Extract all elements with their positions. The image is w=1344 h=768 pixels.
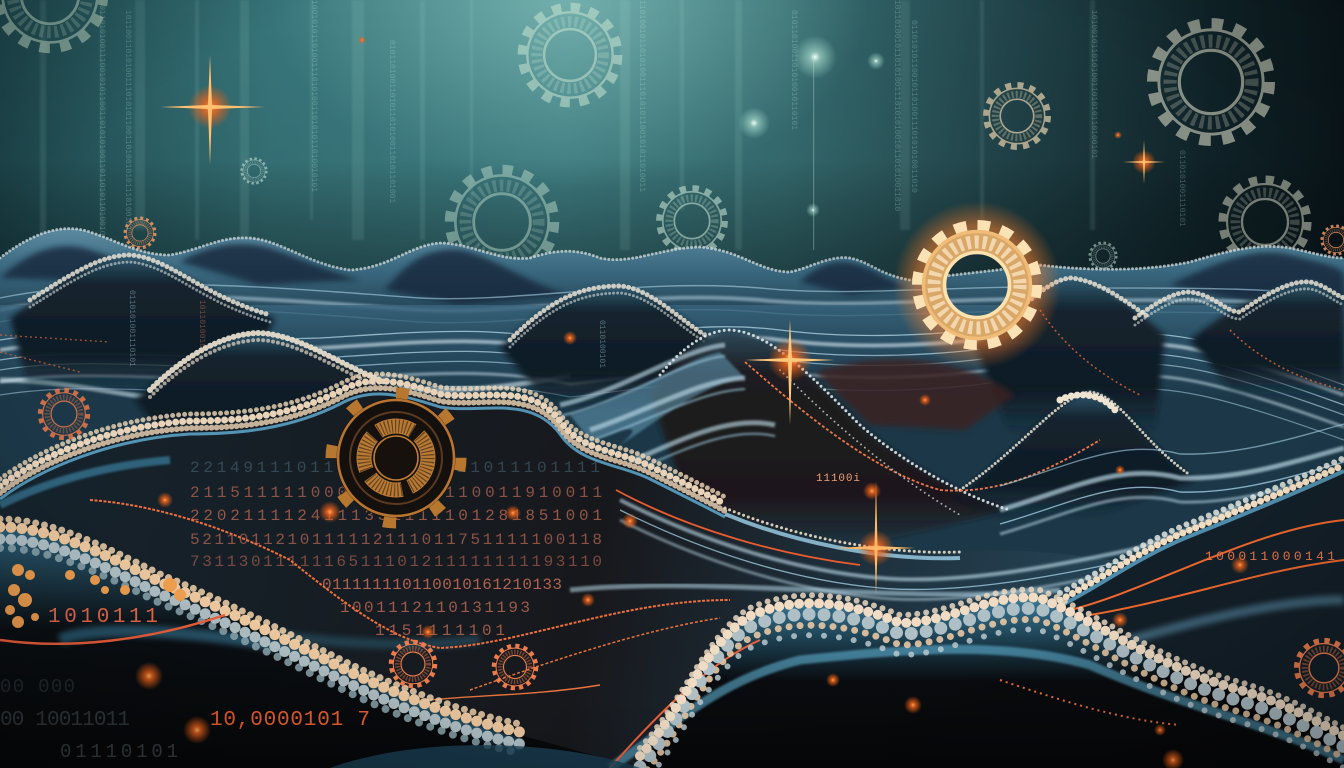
binary rain columns: 0110101001110010101100110101010011011010110100101101	[97, 5, 106, 255]
binary text field: 1001112110131193	[340, 599, 530, 617]
gear: small left	[242, 159, 266, 183]
star flare: upper right	[1123, 140, 1165, 184]
binary column: mid left: 10110100101	[197, 300, 206, 353]
binary text: lower left: 00 000	[0, 676, 75, 698]
binary column: mid left	[127, 290, 606, 368]
gear: orange left	[40, 390, 88, 438]
binary label: 11001: 11100i	[816, 473, 860, 485]
binary text field: 2214911101111101 11111011101111	[190, 459, 600, 477]
binary text field: 5211011210111112111011751111100118	[190, 531, 602, 549]
binary rain columns: 1101001011010100111010101100101011010011	[637, 0, 646, 192]
gear: top left	[0, 0, 103, 48]
wave humps: second ridge	[0, 255, 1344, 435]
orange circuit lines	[90, 490, 860, 700]
gear: orange lower right	[1297, 641, 1344, 695]
wave layer: lower left foreground	[0, 519, 640, 768]
gear: top right	[1153, 24, 1269, 140]
gear: horizon right	[1223, 180, 1307, 264]
wave layer: mid silk base	[0, 305, 1344, 768]
binary text field	[190, 459, 602, 640]
orange glow particles	[135, 331, 1249, 768]
wave layer: horizon	[0, 229, 1344, 768]
binary rain columns: 1001010110100111010100110101011010010101	[309, 0, 318, 192]
gear: horizon centre	[450, 170, 554, 274]
binary rain columns: 1011001101010011101010110011010010101110100101	[123, 10, 132, 231]
gear: upper right small	[986, 85, 1048, 147]
wave layer: right crest	[1060, 458, 1344, 768]
wave humps: third ridge	[135, 330, 1344, 555]
binary column: mid left: 0110100101	[597, 320, 606, 368]
binary rain columns: 1010010110101001101010110100101	[1089, 10, 1098, 159]
binary rain columns: 0101101001101011010100110101101001	[387, 40, 396, 203]
binary rain columns: 0110101001110101	[1177, 150, 1186, 227]
gear: top centre	[522, 7, 618, 103]
binary text: lower left: 10,0000101 7	[210, 709, 370, 732]
gear: small orange left	[125, 218, 155, 248]
gear: horizon small	[1090, 243, 1116, 269]
binary text: lower left: 1010111	[48, 606, 158, 629]
binary text: lower left: 01110101	[60, 741, 178, 763]
wave layer: fourth ridge with binary field	[0, 374, 1344, 768]
binary text field: 011111110110010161210133	[322, 576, 562, 594]
binary text field: 2115111110001 11011110011910011	[190, 484, 602, 502]
binary rain columns: 10110100101101010011101010100101101010011010	[892, 0, 901, 211]
binary rain columns: 0101101001101010010110101	[789, 10, 798, 130]
warm shadow under glowing gear	[815, 359, 1015, 430]
star flare: lower centre	[835, 480, 915, 595]
gear: orange lower centre	[494, 646, 536, 688]
binary rain columns: 011010101100101101001110101010011010	[909, 20, 918, 193]
orange bead cluster: left	[5, 564, 186, 628]
gear: glowing large	[893, 201, 1061, 369]
gear: bronze large	[331, 393, 461, 523]
wave layer: lower right foreground	[330, 589, 1344, 768]
binary text field: 1151111101	[375, 622, 505, 640]
star flare: upper left	[160, 55, 265, 165]
binary text: lower left: 00 10011011	[0, 709, 130, 732]
star flare: wave centre	[745, 320, 835, 425]
binary rain columns	[97, 0, 1186, 255]
gear: horizon centre right	[659, 188, 725, 254]
binary text field: 2202111124111331111101281851001	[190, 507, 602, 525]
binary text: lower left	[0, 606, 370, 763]
binary text field: 7311301111116511101211111111193110	[190, 553, 602, 571]
wave layer: right crest: 100011000141	[1205, 549, 1335, 564]
binary column: mid left: 0110101001110101	[127, 290, 136, 367]
gear: small orange right edge	[1322, 226, 1344, 254]
gear: orange lower centre left	[391, 642, 435, 686]
vertical light streaks	[40, 0, 1095, 250]
glowing orbs	[358, 35, 1122, 250]
